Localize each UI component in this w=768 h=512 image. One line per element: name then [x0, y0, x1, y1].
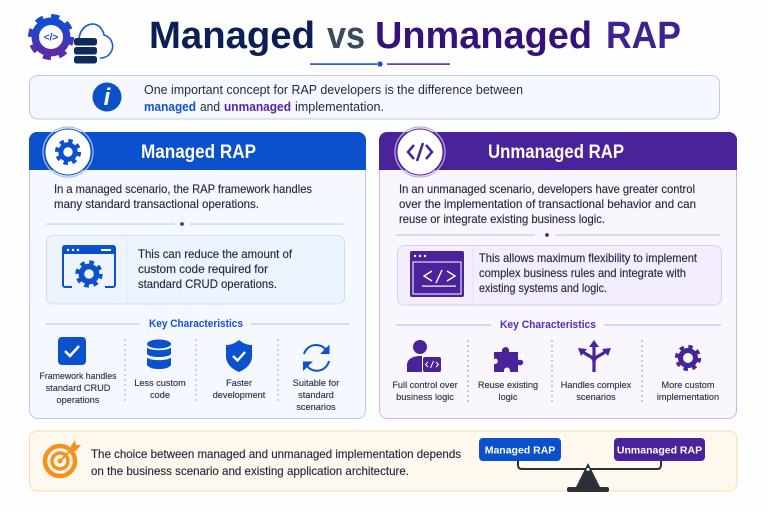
key characteristics heading: Key Characteristics [500, 319, 596, 331]
characteristic: faster development: Faster [226, 378, 252, 388]
title: RAP [606, 15, 681, 57]
key characteristics heading: Key Characteristics [149, 318, 243, 330]
characteristic: reuse existing logic [478, 347, 538, 402]
title [149, 15, 681, 57]
characteristic: full control over business logic: business logic [396, 392, 454, 402]
button: Unmanaged RAP: Unmanaged RAP [617, 444, 702, 456]
benefit text [138, 247, 293, 291]
icon: code window [410, 251, 464, 297]
intro text: managed [144, 99, 196, 114]
characteristic: reuse existing logic: Reuse existing [478, 380, 538, 390]
benefit text: existing systems and logic. [479, 281, 607, 295]
characteristic: suitable for standard scenarios: Suitable for [293, 378, 339, 388]
unmanaged description: In an unmanaged scenario, developers have greater control [399, 182, 695, 196]
conclusion text [91, 447, 461, 478]
button: Managed RAP: Managed RAP [485, 444, 555, 456]
unmanaged description: reuse or integrate existing business logic. [399, 212, 605, 226]
managed benefit box [46, 236, 344, 304]
benefit text: This can reduce the amount of [138, 247, 293, 261]
characteristic: suitable for standard scenarios: scenarios [296, 402, 336, 412]
icon: header code badge [395, 127, 445, 177]
unmanaged description: over the implementation of transactional behavior and can [399, 197, 696, 211]
title: vs [327, 15, 365, 57]
icon: gear, code and cloud database logo [30, 16, 113, 64]
characteristic: faster development [213, 340, 266, 400]
panel header: Unmanaged RAP [379, 132, 737, 170]
title underline [310, 61, 450, 67]
icon: window with gear [63, 246, 115, 287]
icon: gear, code and cloud database logo: </> [44, 32, 58, 44]
characteristic: full control over business logic [392, 340, 458, 402]
conclusion text: on the business scenario and existing application architecture. [91, 464, 409, 478]
characteristic: more custom implementation [657, 347, 719, 402]
characteristic: reuse existing logic: logic [499, 392, 518, 402]
characteristic: more custom implementation: More custom [661, 380, 715, 390]
intro text: One important concept for RAP developers is the difference between [144, 82, 523, 97]
unmanaged description [399, 182, 696, 226]
characteristic: less custom code [134, 340, 186, 400]
benefit text: standard CRUD operations. [138, 277, 277, 291]
panel: Unmanaged RAP [379, 127, 737, 418]
panel: conclusion callout [30, 431, 737, 492]
icon: balance scale [479, 438, 705, 492]
characteristic: handles complex scenarios: scenarios [576, 392, 616, 402]
characteristic: faster development: development [213, 390, 266, 400]
benefit text: complex business rules and integrate with [479, 266, 686, 280]
characteristic: full control over business logic: Full control over [392, 380, 458, 390]
intro text: unmanaged [224, 99, 291, 114]
icon: target with arrow [45, 440, 81, 476]
characteristic: suitable for standard scenarios [293, 344, 339, 412]
characteristic: less custom code: code [150, 390, 170, 400]
icon: header gear badge [43, 127, 93, 177]
characteristic: handles complex scenarios: Handles complex [561, 380, 632, 390]
managed description [54, 182, 312, 211]
panel: intro callout [30, 76, 720, 119]
conclusion text: The choice between managed and unmanaged implementation depends [91, 447, 461, 461]
intro text [144, 82, 523, 114]
panel header: Managed RAP [29, 132, 366, 170]
characteristic: framework handles CRUD: operations [57, 395, 100, 405]
unmanaged benefit box [398, 246, 722, 305]
characteristic: framework handles CRUD: standard CRUD [46, 383, 111, 393]
button: Managed RAP [479, 438, 561, 461]
button: Unmanaged RAP [614, 438, 705, 461]
intro text: implementation. [295, 99, 384, 114]
characteristic: handles complex scenarios [561, 340, 632, 402]
title: Unmanaged [375, 15, 592, 57]
characteristic: less custom code: Less custom [134, 378, 186, 388]
characteristic: suitable for standard scenarios: standard [298, 390, 334, 400]
benefit text [479, 251, 698, 295]
managed description: many standard transactional operations. [54, 197, 259, 211]
characteristic: framework handles CRUD: Framework handles [40, 371, 117, 381]
benefit text: custom code required for [138, 262, 268, 276]
intro text: and [200, 99, 220, 114]
managed description: In a managed scenario, the RAP framework handles [54, 182, 312, 196]
characteristic: framework handles CRUD [40, 337, 117, 405]
panel: Managed RAP [29, 127, 366, 418]
benefit text: This allows maximum flexibility to implement [479, 251, 698, 265]
panel header: Managed RAP: Managed RAP [141, 142, 256, 163]
icon: info [92, 82, 122, 112]
title: Managed [149, 15, 315, 57]
characteristic: more custom implementation: implementation [657, 392, 719, 402]
icon: info: i [104, 84, 112, 111]
panel header: Unmanaged RAP: Unmanaged RAP [488, 142, 624, 163]
